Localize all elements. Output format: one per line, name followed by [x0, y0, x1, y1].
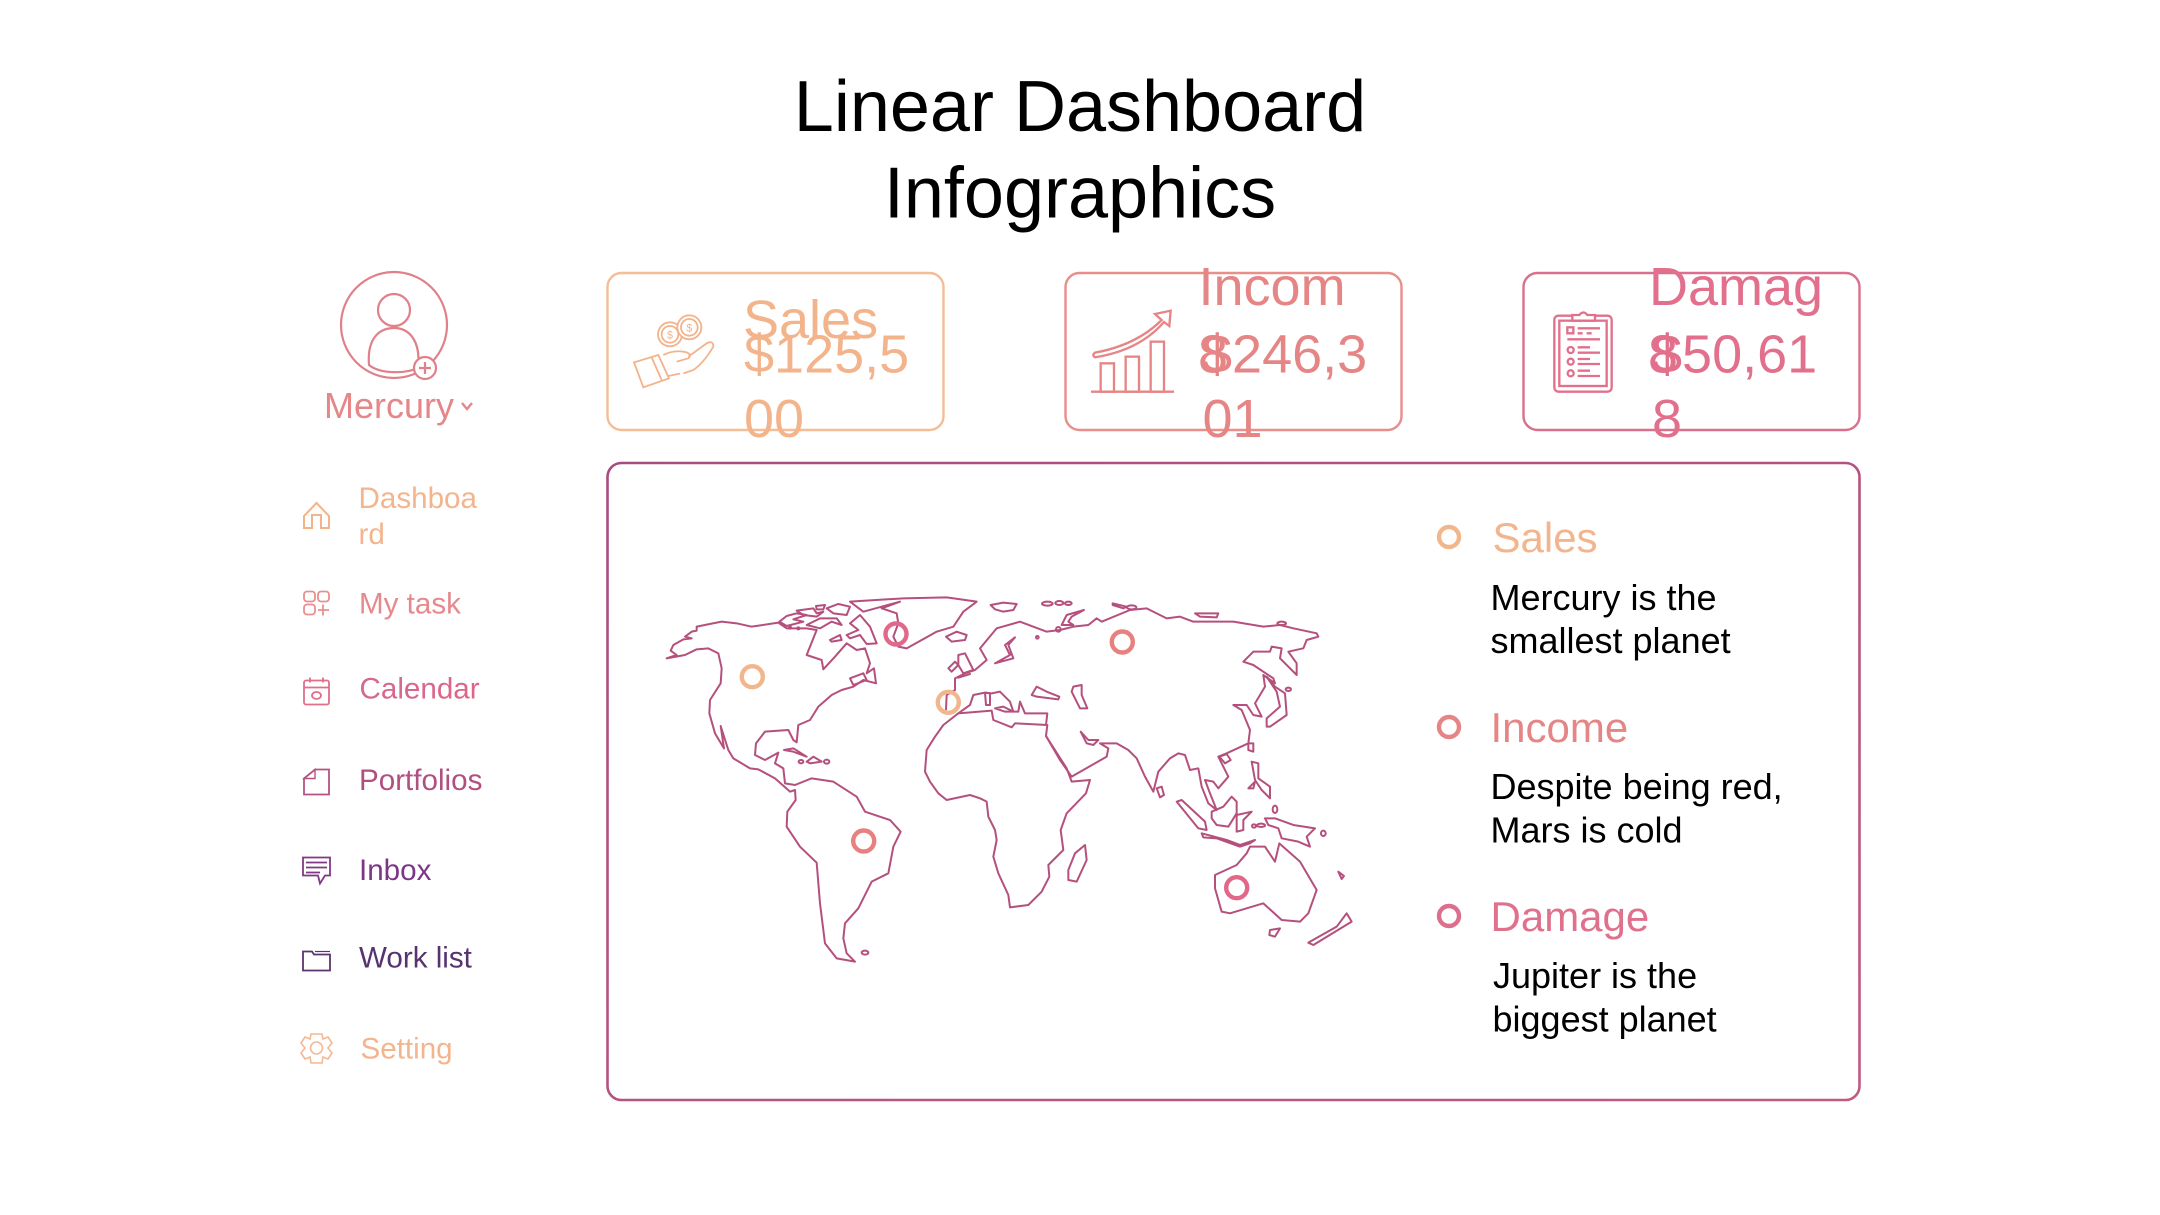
map: Europe, Africa, Asia and Oceania	[925, 601, 1352, 945]
legend: Damage: biggest planet	[1492, 998, 1717, 1040]
icon: clipboard	[1554, 312, 1612, 392]
card value: $246,3	[1202, 324, 1367, 384]
legend: Sales: smallest planet	[1490, 620, 1731, 661]
title: Infographics	[884, 154, 1276, 234]
card label: Damag	[1649, 257, 1823, 317]
icon: growth chart	[1091, 311, 1174, 392]
world map	[667, 597, 1352, 962]
card value: $50,61	[1652, 324, 1817, 384]
menu item: Dashboard: Dashboa	[358, 482, 478, 515]
menu item: Inbox	[303, 854, 432, 887]
card value: 8	[1198, 324, 1228, 384]
legend: Damage	[1439, 893, 1717, 1040]
menu item: Calendar	[304, 672, 480, 706]
menu item: Dashboard: rd	[358, 518, 385, 551]
legend: Damage: Jupiter is the	[1493, 955, 1697, 996]
menu item: My task	[304, 588, 461, 620]
map: Americas	[667, 597, 977, 962]
panel: sidebar menu	[301, 482, 482, 1066]
menu item: Setting: Setting	[360, 1032, 453, 1066]
panel: world map and legend	[608, 463, 1860, 1100]
legend: Sales	[1439, 514, 1731, 661]
menu item: Portfolios: Portfolios	[359, 764, 482, 797]
panel: user profile	[324, 272, 472, 426]
legend: Sales: Mercury is the	[1490, 577, 1717, 618]
icon: hand with coins	[634, 315, 713, 387]
menu item: Dashboard	[304, 482, 478, 551]
card label: Incom	[1198, 257, 1346, 317]
menu item: Portfolios	[304, 764, 482, 797]
card value: $125,5	[744, 324, 909, 384]
panel: income card	[1066, 257, 1402, 449]
icon: dropdown chevron	[462, 403, 472, 409]
panel: sales card	[608, 273, 944, 449]
panel: damage card	[1524, 257, 1860, 449]
legend: Sales: Sales	[1492, 514, 1598, 561]
card value	[1648, 324, 1817, 449]
menu item: Inbox: Inbox	[359, 854, 432, 887]
card value: 8	[1652, 389, 1682, 449]
icon: user avatar	[341, 272, 447, 379]
menu item: Work list	[303, 942, 472, 974]
card value: 8	[1648, 324, 1678, 384]
map markers	[742, 624, 1247, 898]
menu item: Calendar: Calendar	[360, 672, 480, 706]
legend: Income: Mars is cold	[1490, 810, 1683, 850]
legend: Income: Income	[1490, 704, 1628, 751]
title: Linear Dashboard	[794, 67, 1366, 147]
card label: Sales	[743, 290, 878, 350]
card value	[1198, 324, 1367, 449]
legend: Income: Despite being red,	[1490, 766, 1783, 807]
menu item: Work list: Work list	[359, 942, 472, 974]
menu item: My task: My task	[359, 588, 461, 620]
card value: 01	[1202, 389, 1263, 449]
legend: Damage: Damage	[1490, 893, 1649, 940]
menu item: Setting	[301, 1032, 453, 1066]
card value: 00	[744, 389, 804, 449]
title	[794, 67, 1366, 234]
icon: hand with coins: $	[667, 329, 673, 341]
legend: Income	[1439, 704, 1783, 850]
user name: Mercury	[324, 385, 454, 426]
card value	[744, 324, 909, 449]
icon: hand with coins: $	[686, 322, 692, 334]
